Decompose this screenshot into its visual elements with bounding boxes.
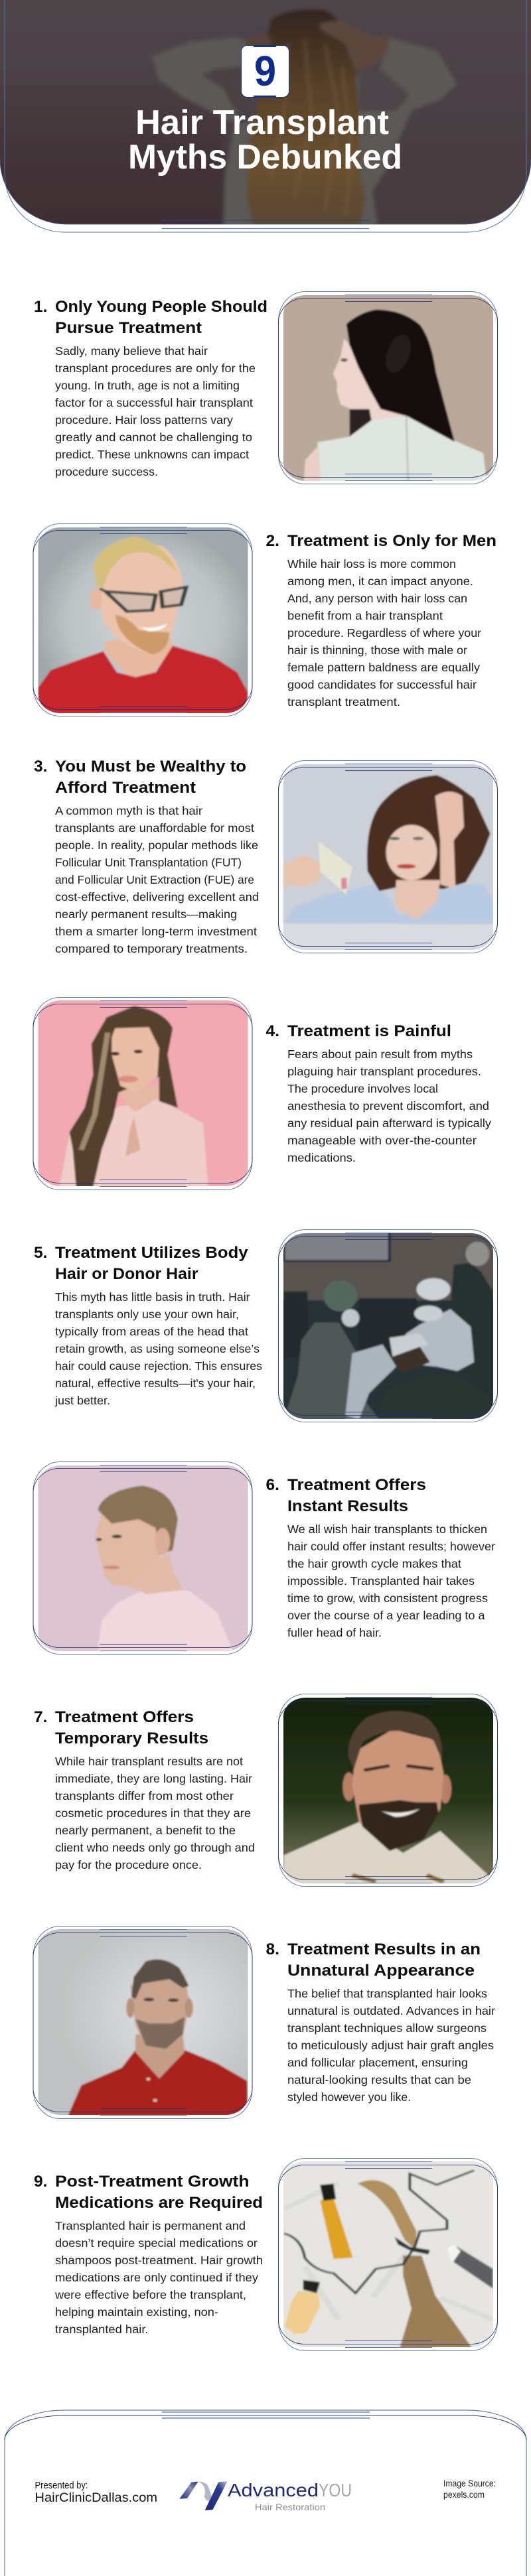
myth 4 heading: Treatment is Painful bbox=[287, 1022, 451, 1040]
myth 7 body text bbox=[55, 1755, 255, 1871]
myth 3 body text: compared to temporary treatments. bbox=[55, 942, 248, 955]
myth 7 body text: cosmetic procedures in that they are bbox=[55, 1806, 251, 1820]
myth 8 heading bbox=[266, 1940, 481, 1980]
myth 6 body text: fuller head of hair. bbox=[287, 1626, 382, 1639]
myth 5 heading: 5. bbox=[34, 1244, 47, 1262]
myth 2 photo frame bbox=[33, 524, 252, 716]
number badge: 9 bbox=[254, 47, 276, 95]
myth 3 photo frame bbox=[279, 760, 498, 953]
logo: AdvancedYOU Hair Restoration: Advanced bbox=[228, 2480, 319, 2500]
myth 7 body text: client who needs only go through and bbox=[55, 1841, 255, 1854]
myth 2 body text bbox=[287, 557, 481, 709]
myth 3 body text: Follicular Unit Transplantation (FUT) bbox=[55, 856, 242, 869]
myth 8 body text: transplant techniques allow surgeons bbox=[287, 2021, 487, 2035]
myth 2 body text: And, any person with hair loss can bbox=[287, 592, 467, 605]
myth 4 photo frame bbox=[33, 998, 252, 1190]
myth 8 body text: The belief that transplanted hair looks bbox=[287, 1987, 487, 2000]
logo mark: ribbon bbox=[179, 2481, 228, 2510]
myth 1 photo: woman with straight black hair bbox=[279, 292, 500, 486]
myth 5 photo frame bbox=[279, 1230, 498, 1422]
myth 2 heading: 2. bbox=[266, 532, 279, 550]
myth 9 body text: were effective before the transplant, bbox=[54, 2288, 246, 2301]
myth 8 body text: natural-looking results that can be bbox=[287, 2073, 471, 2086]
myth 6 body text bbox=[287, 1523, 495, 1639]
myth 8 photo frame bbox=[33, 1927, 252, 2119]
myth 2 body text: among men, it can impact anyone. bbox=[287, 575, 473, 588]
myth 6 photo: person with shaved head bbox=[34, 1459, 254, 1654]
image source: pexels.com bbox=[443, 2489, 485, 2500]
myth 4 body text: The procedure involves local bbox=[287, 1082, 438, 1095]
presented by bbox=[35, 2480, 157, 2505]
myth 6 heading: 6. bbox=[266, 1476, 279, 1494]
logo: AdvancedYOU Hair Restoration: YOU bbox=[319, 2480, 352, 2500]
myth 7 heading: Temporary Results bbox=[55, 1729, 208, 1747]
myth 2 body text: hair is thinning, those with male or bbox=[287, 644, 467, 657]
presented by: HairClinicDallas.com bbox=[35, 2490, 157, 2505]
myth 7 heading bbox=[34, 1708, 208, 1747]
myth 5 body text: hair could cause rejection. This ensures bbox=[55, 1359, 262, 1373]
myth 4 body text: Fears about pain result from myths bbox=[287, 1048, 473, 1061]
myth 7 body text: pay for the procedure once. bbox=[55, 1858, 202, 1871]
myth 9 heading: Medications are Required bbox=[55, 2194, 263, 2212]
myth 4 body text: plaguing hair transplant procedures. bbox=[287, 1065, 481, 1078]
myth 3 body text: them a smarter long-term investment bbox=[55, 925, 257, 938]
myth 3 photo: curly-haired woman holding a banknote bbox=[283, 764, 493, 950]
myth 6 body text: impossible. Transplanted hair takes bbox=[287, 1574, 475, 1588]
myth 9 body text: medications are only continued if they bbox=[55, 2271, 258, 2284]
logo: AdvancedYOU Hair Restoration bbox=[179, 2480, 352, 2512]
myth 2 body text: female pattern baldness are equally bbox=[287, 661, 480, 674]
footer bbox=[5, 2410, 526, 2576]
myth 1 heading: Only Young People Should bbox=[55, 298, 267, 316]
myth 1 body text: greatly and cannot be challenging to bbox=[55, 431, 252, 444]
myth 9 heading bbox=[34, 2173, 263, 2212]
myth 6 body text: time to grow, with consistent progress bbox=[287, 1592, 488, 1605]
myth 3 bbox=[34, 758, 501, 955]
myth 4 body text bbox=[287, 1048, 491, 1164]
myth 4 body text: any residual pain afterward is typically bbox=[287, 1117, 491, 1130]
myth 2 body text: benefit from a hair transplant bbox=[287, 609, 443, 622]
myth 1 heading bbox=[34, 298, 267, 337]
logo: AdvancedYOU Hair Restoration: Hair Restoration bbox=[255, 2502, 325, 2512]
myth 9 bbox=[34, 2156, 501, 2351]
myth 7 body text: nearly permanent, a benefit to the bbox=[55, 1824, 236, 1837]
myth 2 heading: Treatment is Only for Men bbox=[287, 532, 496, 550]
myth 3 heading bbox=[34, 758, 246, 797]
myth 6 body text: hair could offer instant results; however bbox=[287, 1540, 495, 1553]
header photo: woman with long hair from behind bbox=[0, 0, 531, 239]
myth 9 body text: doesn’t require special medications or bbox=[55, 2236, 258, 2250]
header banner bbox=[0, 0, 531, 239]
myth 1 photo frame bbox=[279, 292, 498, 484]
myth 2 bbox=[33, 524, 496, 718]
myth 1 body text: young. In truth, age is not a limiting bbox=[55, 379, 240, 392]
myth 3 body text: cost-effective, delivering excellent and bbox=[55, 890, 259, 904]
myth 5 body text: typically from areas of the head that bbox=[55, 1325, 248, 1338]
myth 1 body text bbox=[55, 344, 256, 478]
myth 2 body text: good candidates for successful hair bbox=[287, 678, 477, 691]
myth 1 body text: Sadly, many believe that hair bbox=[55, 344, 208, 358]
footer frame lines bbox=[5, 2410, 526, 2576]
image source: Image Source: bbox=[443, 2478, 496, 2488]
myth 7 photo frame bbox=[279, 1694, 498, 1887]
myth 1 body text: procedure. Hair loss patterns vary bbox=[55, 413, 233, 427]
myth 9 body text: transplanted hair. bbox=[55, 2323, 149, 2336]
myth 2 photo: smiling man with glasses bbox=[34, 524, 254, 718]
myth 1 body text: predict. These unknowns can impact bbox=[55, 448, 249, 461]
myth 7 heading: 7. bbox=[34, 1708, 47, 1726]
title: Myths Debunked bbox=[128, 138, 402, 176]
myth 8 body text: to meticulously adjust hair graft angles bbox=[287, 2039, 494, 2052]
image source bbox=[443, 2478, 496, 2500]
header frame lines bbox=[0, 0, 531, 232]
myth 9 photo frame bbox=[279, 2159, 498, 2351]
myth 6 heading: Instant Results bbox=[287, 1497, 408, 1515]
presented by: Presented by: bbox=[35, 2480, 88, 2491]
myth 8 heading: Treatment Results in an bbox=[287, 1940, 481, 1958]
myth 5 bbox=[34, 1229, 501, 1424]
myth 9 body text: Transplanted hair is permanent and bbox=[55, 2219, 246, 2232]
myth 7 body text: While hair transplant results are not bbox=[55, 1755, 243, 1768]
myth 7 bbox=[34, 1694, 501, 1889]
myth 6 bbox=[33, 1459, 495, 1655]
myth 3 body text: A common myth is that hair bbox=[55, 804, 202, 817]
myth 3 body text: people. In reality, popular methods like bbox=[55, 839, 258, 852]
myth 9 body text: helping maintain existing, non- bbox=[55, 2305, 218, 2319]
myth 7 heading: Treatment Offers bbox=[55, 1708, 194, 1726]
myth 3 body text: and Follicular Unit Extraction (FUE) are bbox=[55, 873, 254, 886]
myth 6 body text: We all wish hair transplants to thicken bbox=[287, 1523, 487, 1536]
myth 4 photo: worried woman on pink background bbox=[34, 995, 254, 1189]
myth 3 heading: Afford Treatment bbox=[55, 779, 196, 797]
myth 5 heading: Treatment Utilizes Body bbox=[55, 1244, 248, 1262]
myth 7 photo: bearded smiling man bbox=[283, 1698, 493, 1883]
myth 5 body text: transplants only use your own hair, bbox=[55, 1308, 239, 1321]
myth 9 body text: shampoos post-treatment. Hair growth bbox=[55, 2254, 263, 2267]
myth 8 heading: 8. bbox=[266, 1940, 279, 1958]
myth 1 heading: 1. bbox=[34, 298, 47, 316]
myth 9 body text bbox=[54, 2219, 263, 2336]
title: Hair Transplant bbox=[135, 103, 389, 142]
myth 6 photo frame bbox=[33, 1462, 252, 1655]
myth 4 body text: anesthesia to prevent discomfort, and bbox=[287, 1099, 489, 1113]
myth 3 heading: You Must be Wealthy to bbox=[55, 758, 246, 776]
myth 8 heading: Unnatural Appearance bbox=[287, 1962, 475, 1980]
myth 5 photo: surgeons operating on a patient bbox=[283, 1233, 493, 1419]
myth 1 body text: factor for a successful hair transplant bbox=[55, 396, 253, 409]
myth 8 photo: skeptical man in red polo bbox=[34, 1924, 254, 2118]
myth 6 body text: over the course of a year leading to a bbox=[287, 1609, 485, 1622]
myth 4 bbox=[33, 995, 491, 1190]
myth 6 body text: the hair growth cycle makes that bbox=[287, 1557, 461, 1570]
number badge bbox=[242, 45, 289, 97]
myth 3 body text: transplants are unaffordable for most bbox=[55, 821, 254, 835]
myth 9 heading: Post-Treatment Growth bbox=[55, 2173, 250, 2191]
myth 5 body text: natural, effective results—it's your hair, bbox=[55, 1377, 256, 1390]
myth 7 body text: immediate, they are long lasting. Hair bbox=[55, 1772, 252, 1785]
myth 1 body text: transplant procedures are only for the bbox=[55, 362, 256, 375]
myth 4 body text: manageable with over-the-counter bbox=[287, 1134, 477, 1147]
myth 8 bbox=[33, 1924, 495, 2119]
myth 5 body text bbox=[54, 1290, 262, 1407]
myth 3 body text: nearly permanent results—making bbox=[55, 908, 237, 921]
myth 3 body text bbox=[55, 804, 259, 955]
myth 8 body text bbox=[287, 1987, 495, 2104]
myth 1 body text: procedure success. bbox=[55, 465, 158, 478]
myth 2 body text: While hair loss is more common bbox=[287, 557, 456, 571]
myth 7 body text: transplants differ from most other bbox=[55, 1789, 234, 1802]
myth 5 body text: This myth has little basis in truth. Hair bbox=[55, 1290, 250, 1304]
myth 6 heading: Treatment Offers bbox=[287, 1476, 426, 1494]
myth 5 body text: just better. bbox=[54, 1394, 110, 1407]
myth 1 heading: Pursue Treatment bbox=[55, 319, 202, 337]
myth 8 body text: styled however you like. bbox=[287, 2090, 411, 2104]
myth 8 body text: unnatural is outdated. Advances in hair bbox=[287, 2004, 495, 2017]
myth 6 heading bbox=[266, 1476, 426, 1515]
myth 4 heading: 4. bbox=[266, 1022, 279, 1040]
myth 9 heading: 9. bbox=[34, 2173, 47, 2191]
myth 5 heading bbox=[34, 1244, 248, 1283]
myth 5 heading: Hair or Donor Hair bbox=[55, 1265, 198, 1283]
myth 2 body text: procedure. Regardless of where your bbox=[287, 626, 481, 640]
myth 2 body text: transplant treatment. bbox=[287, 695, 400, 709]
myth 1 bbox=[34, 292, 500, 486]
myth 3 heading: 3. bbox=[34, 758, 47, 776]
title bbox=[128, 103, 402, 176]
myth 5 body text: retain growth, as using someone else’s bbox=[55, 1342, 260, 1355]
myth 4 body text: medications. bbox=[287, 1151, 356, 1164]
myth 9 photo: hair products and braid bbox=[283, 2161, 493, 2347]
myth 8 body text: and follicular placement, ensuring bbox=[287, 2056, 468, 2069]
